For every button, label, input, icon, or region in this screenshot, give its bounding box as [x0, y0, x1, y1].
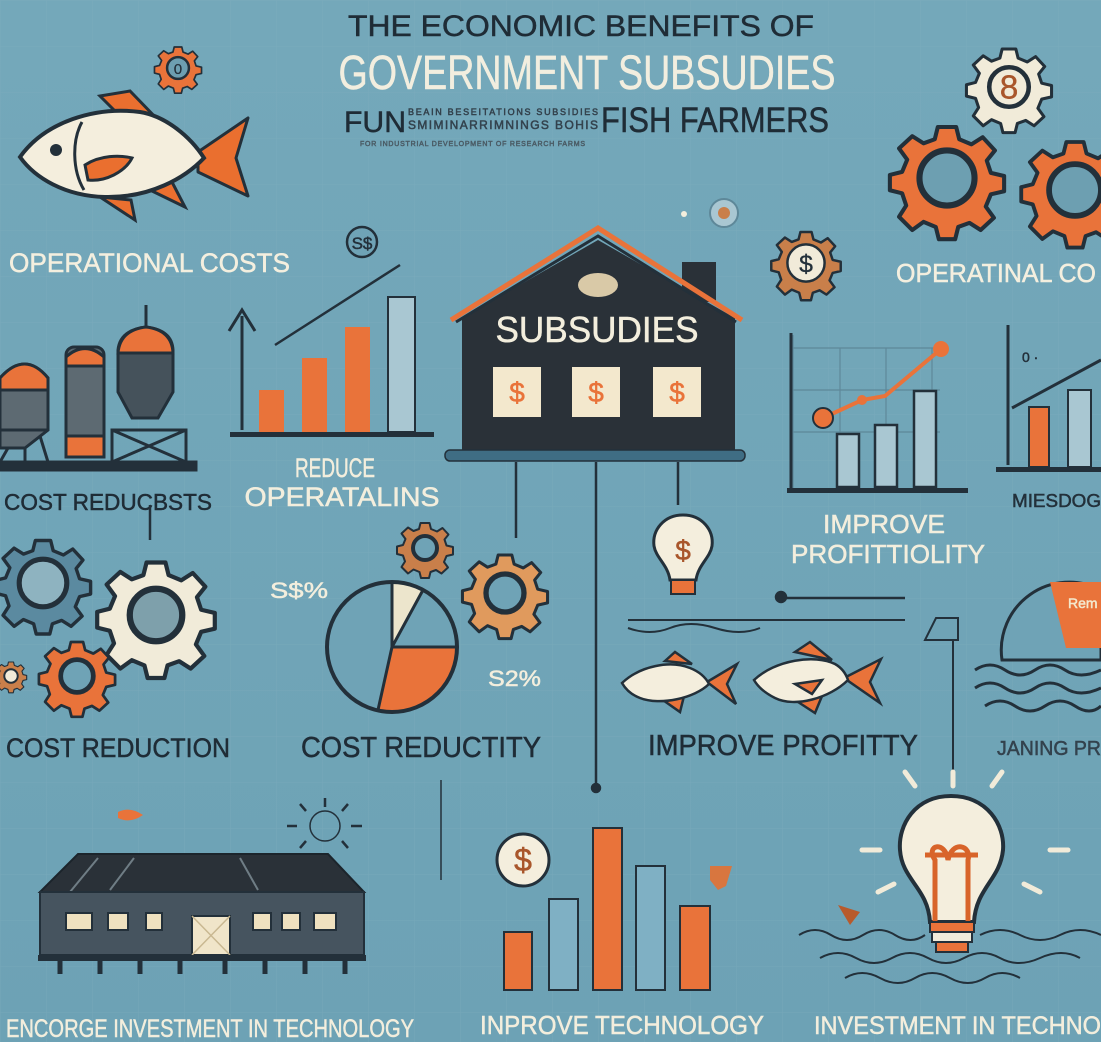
icon: dollar coin: [497, 834, 549, 886]
bar chart: improve technology: [504, 828, 710, 990]
central subsidies building: $: [588, 377, 604, 408]
icon: small gear top left: [154, 47, 202, 93]
text: reduce operations: [244, 453, 440, 512]
pie chart: S2%: [488, 666, 541, 691]
central subsidies building: [445, 228, 745, 461]
icon: dollar gear center right: $: [799, 251, 813, 278]
bar chart: right edge: 0 ·: [1022, 349, 1038, 365]
heading: operational costs left: OPERATIONAL COSTS: [9, 248, 290, 278]
bar chart: growth left: [229, 227, 434, 437]
title: FOR INDUSTRIAL DEVELOPMENT OF RESEARCH FARMS: [360, 141, 585, 148]
icon: small sun bulb top of barn: [118, 798, 362, 848]
icon: two fish on water: [622, 620, 905, 713]
icon: dollar gear center right: [771, 232, 841, 300]
central subsidies building: $: [669, 377, 685, 408]
text: right edge small label: MIESDOG: [1012, 491, 1101, 511]
text: improve profitability: [791, 509, 985, 569]
icon: gears top right: 8: [1000, 69, 1018, 106]
title: [338, 10, 836, 148]
text: reduce operations: REDUCE: [295, 453, 375, 483]
icon: gauge and waves right: Rem: [1068, 595, 1098, 611]
icon: small coin above building: [681, 199, 738, 227]
bar chart: right edge: [996, 325, 1101, 472]
icon: gauge and waves right: [925, 582, 1101, 711]
title: BEAIN BESEITATIONS SUBSIDIES: [408, 107, 598, 117]
line chart: improve profitability: [787, 333, 968, 493]
icon: factory barn: [38, 854, 366, 974]
text: saving right edge: JANING PR: [997, 738, 1101, 760]
title: SMIMINARRIMNINGS BOHIS: [408, 118, 598, 132]
icon: small lightbulb: $: [675, 535, 691, 566]
text: cost reduction left: COST REDUCBSTS: [4, 489, 212, 515]
icon: gears left: [0, 540, 215, 717]
text: cost reductivity: COST REDUCTITY: [301, 732, 541, 764]
title: FUN: [344, 106, 406, 139]
icon: large lightbulb: [799, 772, 1101, 983]
icon: small lightbulb: [654, 515, 712, 594]
icon: silos left: [0, 305, 196, 470]
icon: dollar coin: $: [514, 842, 532, 878]
bar chart: growth left: S$: [352, 234, 373, 253]
pie chart: [270, 578, 541, 712]
central subsidies building: SUBSUDIES: [496, 309, 698, 350]
text: improve technology: INPROVE TECHNOLOGY: [480, 1010, 764, 1040]
icon: gears top right: [890, 49, 1101, 248]
icon: gears beside pie: [397, 523, 548, 639]
text: reduce operations: OPERATALINS: [244, 482, 440, 512]
text: improve profitability: IMPROVE: [823, 509, 945, 539]
icon: small tag by bars: [710, 866, 732, 890]
pie chart: S$%: [270, 578, 328, 603]
arrows: connector lines from building: [150, 462, 953, 880]
text: cost reduction: COST REDUCTION: [6, 733, 230, 763]
central subsidies building: $: [509, 377, 525, 408]
title: THE ECONOMIC BENEFITS OF: [348, 10, 814, 43]
title: GOVERNMENT SUBSUDIES: [338, 47, 836, 100]
text: improve profitability: PROFITTIOLITY: [791, 539, 985, 569]
icon: large fish top left: [20, 91, 248, 220]
heading: operational costs right: OPERATINAL CO: [896, 258, 1096, 288]
title: FISH FARMERS: [601, 101, 829, 140]
text: improve profitity: IMPROVE PROFITTY: [648, 730, 918, 762]
icon: small gear top left: 0: [174, 61, 182, 78]
